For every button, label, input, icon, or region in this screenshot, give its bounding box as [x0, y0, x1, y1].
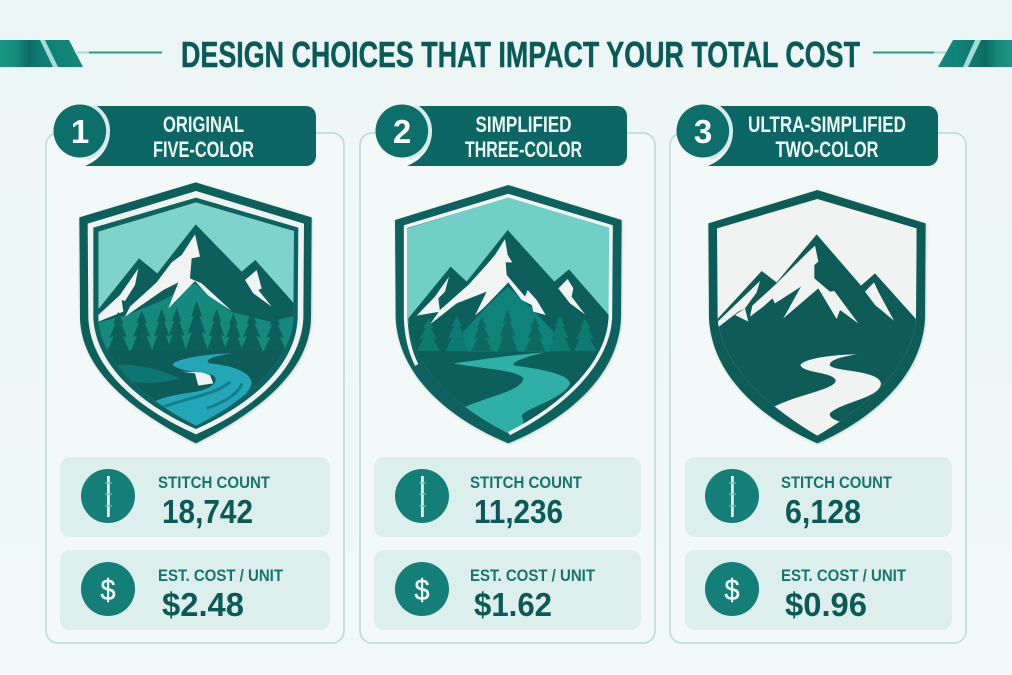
shield patch: three-color [395, 185, 622, 443]
stat: cost $0.96: $0.96 [785, 586, 867, 623]
panel 1 badge [54, 104, 316, 166]
icon: dollar: $ [414, 574, 430, 607]
stat: cost $2.48 [60, 550, 330, 630]
panel 3 badge [676, 104, 938, 166]
panel 2: simplified three-color [360, 104, 655, 643]
panel 2 badge: 2 [393, 113, 411, 150]
icon: dollar [705, 562, 759, 616]
icon: dollar [81, 562, 135, 616]
panel 3 badge: TWO-COLOR [776, 137, 879, 162]
panel 1 badge: FIVE-COLOR [153, 137, 254, 162]
stat: stitch count 18,742 [60, 457, 330, 537]
panel 3: ultra-simplified two-color [670, 104, 966, 643]
shield patch: two-color [708, 190, 926, 443]
stat: stitch count 11,236 [374, 457, 641, 537]
icon: stitch [395, 469, 449, 523]
stat: stitch count 6,128: STITCH COUNT [781, 473, 893, 492]
stat: stitch count 18,742: 18,742 [162, 493, 253, 530]
icon: stitch [705, 469, 759, 523]
stat: stitch count 11,236: STITCH COUNT [470, 473, 583, 492]
stat: stitch count 11,236: 11,236 [474, 493, 563, 530]
panel 2 badge [376, 104, 627, 166]
panel 3 badge: 3 [694, 113, 712, 150]
shield patch: five-color [79, 182, 312, 443]
header ornament: right [873, 40, 1012, 67]
stat: cost $1.62: $1.62 [474, 586, 552, 623]
header ornament: left [0, 40, 162, 67]
stat: cost $1.62: EST. COST / UNIT [470, 566, 596, 585]
stat: cost $0.96: EST. COST / UNIT [781, 566, 907, 585]
panel 1 badge: ORIGINAL [163, 112, 244, 137]
stat: cost $2.48: EST. COST / UNIT [158, 566, 284, 585]
icon: stitch [81, 469, 135, 523]
stat: stitch count 6,128 [685, 457, 952, 537]
icon: dollar: $ [100, 574, 116, 607]
panel 3 card [670, 133, 966, 643]
panel 1: original five-color [46, 104, 344, 643]
panel 1 badge: 1 [71, 113, 89, 150]
panel 2 card [360, 133, 655, 643]
panel 2 badge: SIMPLIFIED [476, 112, 572, 137]
stat: cost $0.96 [685, 550, 952, 630]
stat: stitch count 18,742: STITCH COUNT [158, 473, 271, 492]
stat: cost $1.62 [374, 550, 641, 630]
panel 1 card [46, 133, 344, 643]
panel 2 badge: THREE-COLOR [465, 137, 582, 162]
icon: dollar [395, 562, 449, 616]
stat: stitch count 6,128: 6,128 [785, 493, 861, 530]
panel 3 badge: ULTRA-SIMPLIFIED [748, 112, 906, 137]
stat: cost $2.48: $2.48 [162, 586, 244, 623]
icon: dollar: $ [724, 574, 740, 607]
